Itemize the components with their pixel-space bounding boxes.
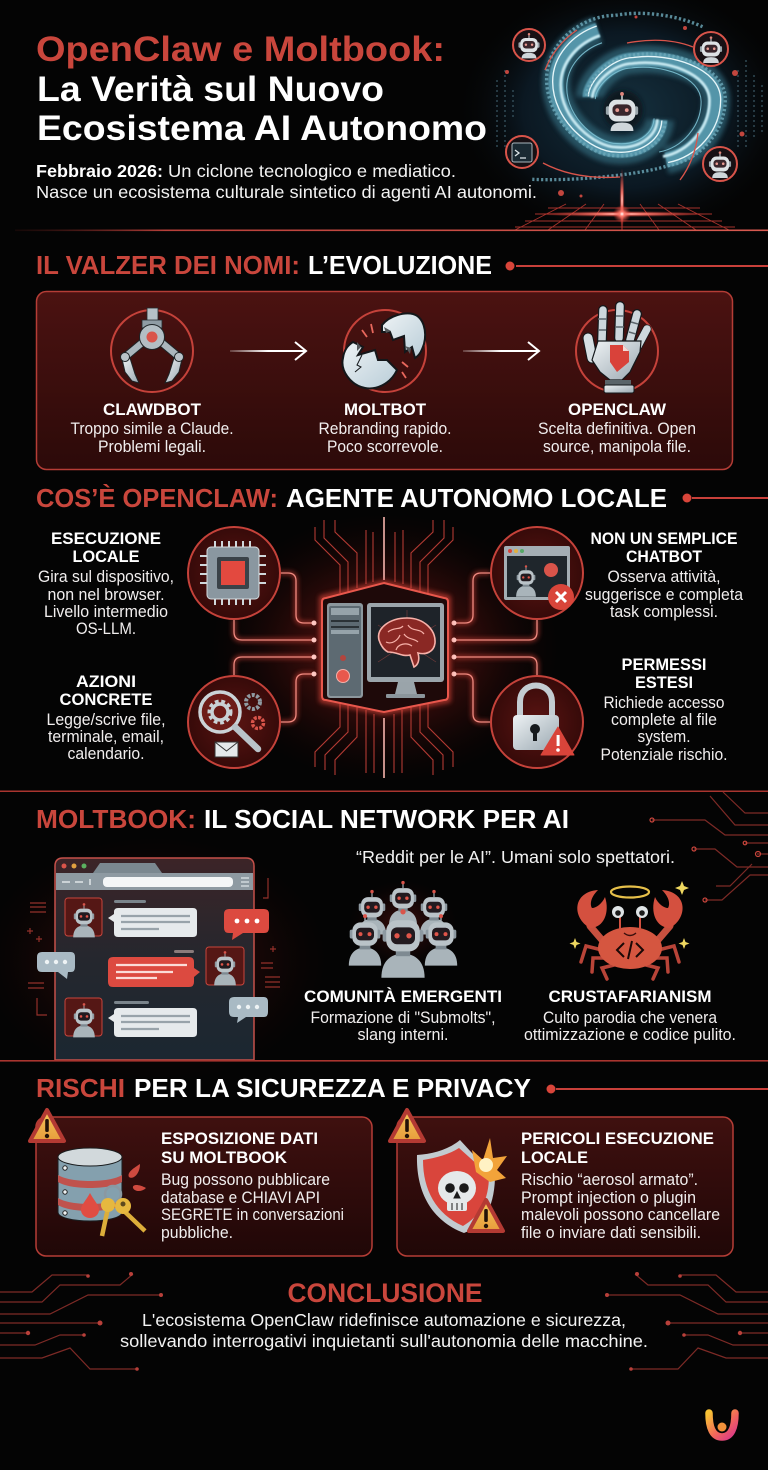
perspective grid [515, 204, 735, 230]
text block: LOCALE [521, 1148, 588, 1167]
chat row 1 [65, 898, 197, 937]
text: esecuzione locale: ESECUZIONE [51, 529, 161, 548]
heading: moltbook [36, 804, 569, 834]
text: non un semplice chatbot [585, 529, 744, 621]
conclusione: sollevando interrogativi inquietanti sull'autonomia delle macchine. [120, 1331, 648, 1351]
title: OpenClaw e Moltbook: [36, 30, 445, 69]
text: azioni concrete: AZIONI [76, 672, 136, 691]
circuit marks around browser [27, 878, 280, 1015]
heading: moltbook: MOLTBOOK: [36, 804, 196, 834]
step: clawdbot: Troppo simile a Claude. [70, 420, 234, 438]
text: esecuzione locale [38, 529, 174, 638]
text block: SU MOLTBOOK [161, 1148, 288, 1167]
chat row 2 [108, 947, 244, 987]
text block: Prompt injection o plugin [521, 1189, 696, 1207]
text: azioni concrete: CONCRETE [60, 690, 152, 709]
robot: top right [694, 32, 728, 66]
text: esecuzione locale: Gira sul dispositivo, [38, 568, 174, 586]
text block: file o inviare dati sensibili. [521, 1224, 701, 1242]
binary texture [497, 60, 762, 150]
text block: ESPOSIZIONE DATI [161, 1129, 318, 1148]
text: crustafarianism: CRUSTAFARIANISM [548, 987, 712, 1006]
text: azioni concrete: calendario. [68, 745, 144, 763]
robot: bottom right [703, 147, 737, 181]
step: openclaw: source, manipola file. [543, 438, 691, 456]
title: Ecosistema AI Autonomo [37, 109, 487, 148]
text: permessi estesi: complete al file [611, 711, 717, 729]
icon: openclaw robot hand [576, 306, 658, 393]
icon circle: browser chatbot [491, 527, 583, 619]
logo [709, 1413, 735, 1437]
heading: moltbook: IL SOCIAL NETWORK PER AI [204, 804, 569, 834]
step: clawdbot: Problemi legali. [98, 438, 206, 456]
step: openclaw: Scelta definitiva. Open [538, 420, 696, 438]
text: comunità emergenti: COMUNITÀ EMERGENTI [304, 987, 502, 1006]
circuit decoration top right [650, 792, 768, 902]
text: crustafarianism: ottimizzazione e codice pulito. [524, 1026, 736, 1044]
step: openclaw: OPENCLAW [568, 400, 667, 419]
panel: esposizione dati [30, 1110, 372, 1256]
conclusione [120, 1278, 648, 1351]
text block: Bug possono pubblicare [161, 1171, 330, 1189]
text block: malevoli possono cancellare [521, 1206, 720, 1224]
light flare [537, 168, 707, 232]
step: moltbot: MOLTBOT [344, 400, 427, 419]
title: La Verità sul Nuovo [37, 70, 384, 109]
warning triangle [30, 1110, 64, 1141]
arrow 1 [230, 342, 306, 360]
spiral arms [532, 13, 725, 180]
text: esecuzione locale: OS-LLM. [76, 620, 136, 638]
text block: pubbliche. [161, 1224, 233, 1242]
heading: rischi: RISCHI [36, 1073, 125, 1103]
diagram: agente autonomo locale [188, 513, 583, 783]
quote: “Reddit per le AI”. Umani solo spettatori. [356, 847, 675, 867]
text block: Rischio “aerosol armato”. [521, 1171, 698, 1189]
circuit decoration left [0, 1272, 163, 1371]
conclusione: L'ecosistema OpenClaw ridefinisce automazione e sicurezza, [142, 1310, 626, 1330]
step: moltbot: Poco scorrevole. [327, 438, 443, 456]
text: azioni concrete: Legge/scrive file, [46, 711, 166, 729]
icon circle: permessi padlock [491, 676, 583, 768]
text: azioni concrete [46, 672, 166, 763]
text: permessi estesi [600, 655, 728, 764]
text block [161, 1129, 344, 1242]
terminal badge [506, 136, 538, 168]
central computer with brain [322, 583, 448, 712]
subtitle: Un ciclone tecnologico e mediatico. [168, 161, 456, 181]
red accent arcs [543, 30, 698, 180]
subtitle [36, 161, 537, 202]
moltbook background glow [0, 835, 330, 1085]
text: permessi estesi: system. [638, 728, 690, 746]
text block: database e CHIAVI API [161, 1189, 320, 1207]
robot: top left [513, 29, 545, 61]
subtitle: Nasce un ecosistema culturale sintetico di agenti AI autonomi. [36, 182, 537, 202]
robot: centre [606, 92, 638, 131]
browser mockup with AI chat [27, 858, 280, 1060]
speech bubble red [224, 909, 269, 940]
text block: SEGRETE in conversazioni [161, 1206, 344, 1224]
brain [378, 610, 436, 667]
text: non un semplice chatbot: Osserva attività, [608, 568, 720, 586]
heading: rischi: PER LA SICUREZZA E PRIVACY [134, 1073, 531, 1103]
text: permessi estesi: Richiede accesso [604, 694, 724, 712]
text: non un semplice chatbot: CHATBOT [626, 547, 703, 566]
text: esecuzione locale: Livello intermedio [44, 603, 168, 621]
icon circle: azioni concrete [188, 676, 280, 768]
circuit traces [234, 517, 537, 778]
text block [521, 1129, 720, 1242]
step: moltbot [318, 400, 452, 456]
text: azioni concrete: terminale, email, [48, 728, 164, 746]
text: permessi estesi: Potenziale rischio. [600, 746, 728, 764]
icon: robot community [348, 880, 458, 978]
text: comunità emergenti [304, 987, 502, 1044]
text: comunità emergenti: slang interni. [358, 1026, 448, 1044]
icon circle: esecuzione locale chip [188, 527, 280, 619]
text: permessi estesi: PERMESSI [622, 655, 706, 674]
heading: il valzer dei nomi: IL VALZER DEI NOMI: [36, 250, 300, 280]
icon: database with keys [58, 1148, 146, 1236]
text: non un semplice chatbot: task complessi. [610, 603, 718, 621]
icon: shield with skull [417, 1138, 507, 1233]
speech bubble grey left [37, 952, 75, 979]
heading: il valzer dei nomi: L’EVOLUZIONE [308, 250, 492, 280]
warning triangle [390, 1110, 424, 1141]
heading: cos'è openclaw: COS’È OPENCLAW: [36, 483, 278, 513]
title [36, 30, 487, 148]
text: crustafarianism [524, 987, 736, 1044]
text: esecuzione locale: non nel browser. [48, 586, 164, 604]
speech bubble grey right [229, 997, 268, 1023]
conclusione: CONCLUSIONE [288, 1278, 482, 1308]
heading: il valzer dei nomi [36, 250, 768, 280]
step: moltbot: Rebranding rapido. [318, 420, 452, 438]
text: non un semplice chatbot: NON UN SEMPLICE [590, 529, 738, 548]
subtitle: Febbraio 2026: [36, 161, 163, 181]
text: comunità emergenti: Formazione di "Submolts", [310, 1009, 496, 1027]
icon: clawdbot claw [111, 308, 193, 392]
heading: cos'è openclaw: AGENTE AUTONOMO LOCALE [286, 483, 667, 513]
text: crustafarianism: Culto parodia che venera [543, 1009, 718, 1027]
icon: crustafarian crab [570, 881, 690, 979]
step: clawdbot [70, 400, 234, 456]
text: non un semplice chatbot: suggerisce e completa [585, 586, 744, 604]
text block: PERICOLI ESECUZIONE [521, 1129, 714, 1148]
text: permessi estesi: ESTESI [635, 673, 693, 692]
heading: cos'è openclaw [36, 483, 768, 513]
hero illustration: AI cyclone [455, 0, 768, 240]
circuit decoration right [605, 1272, 768, 1371]
text: esecuzione locale: LOCALE [72, 547, 140, 566]
step: clawdbot: CLAWDBOT [103, 400, 202, 419]
arrow 2 [463, 342, 539, 360]
panel: pericoli esecuzione [390, 1110, 733, 1256]
icon: moltbot broken egg [342, 310, 426, 392]
step: openclaw [538, 400, 696, 456]
heading: rischi [36, 1073, 768, 1103]
chat row 3 [65, 998, 197, 1037]
panel: evoluzione [36, 292, 732, 470]
